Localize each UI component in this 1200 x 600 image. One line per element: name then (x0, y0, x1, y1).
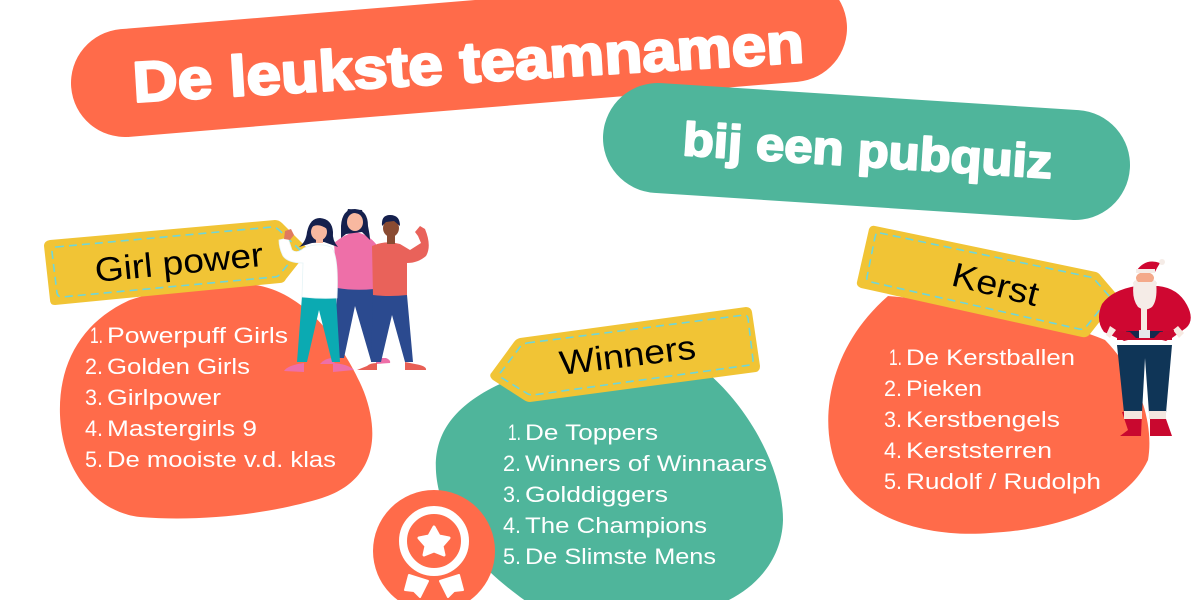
list: Girl power names: Powerpuff Girls (107, 323, 288, 348)
woman left (279, 218, 354, 372)
list: Girl power names: 3. (85, 385, 103, 410)
title banner: De leukste teamnamen: De leukste teamnamen (131, 11, 806, 115)
tag: Kerst: Kerst (948, 256, 1043, 314)
list: Kerst names: 2. (884, 376, 902, 401)
list: Winners names: Winners of Winnaars (525, 451, 767, 476)
list: Girl power names: Mastergirls 9 (107, 416, 257, 441)
list: Girl power names: De mooiste v.d. klas (107, 447, 336, 472)
list: Kerst names: 4. (884, 438, 902, 463)
blob: Winners background (436, 366, 783, 600)
list: Girl power names: 2. (85, 354, 103, 379)
list: Girl power names: 4. (85, 416, 103, 441)
panel: Kerst (828, 226, 1191, 534)
list: Kerst names: Pieken (906, 376, 982, 401)
list: Girl power names: 1. (90, 323, 103, 348)
blob: Girl power background (60, 284, 372, 518)
tag: Kerst (857, 226, 1119, 337)
list: Kerst names: 1. (889, 345, 902, 370)
icon: medal (373, 490, 495, 600)
list: Winners names: 5. (503, 544, 521, 569)
panel: Winners (373, 307, 783, 600)
list: Winners names: 3. (503, 482, 521, 507)
woman right (357, 215, 429, 370)
list: Winners names: 2. (503, 451, 521, 476)
woman centre (320, 209, 390, 364)
list: Kerst names (884, 345, 1101, 494)
list: Girl power names (85, 323, 336, 472)
blob: Kerst background (828, 296, 1149, 534)
tag: Winners (490, 307, 760, 402)
list: Kerst names: Kerststerren (906, 438, 1052, 463)
list: Kerst names: De Kerstballen (906, 345, 1075, 370)
list: Girl power names: 5. (85, 447, 103, 472)
list: Kerst names: Rudolf / Rudolph (906, 469, 1101, 494)
tag: Winners: Winners (557, 329, 698, 383)
list: Winners names: 4. (503, 513, 521, 538)
list: Winners names: Golddiggers (525, 482, 668, 507)
list: Winners names: The Champions (525, 513, 707, 538)
list: Girl power names: Girlpower (107, 385, 221, 410)
list: Winners names: De Slimste Mens (525, 544, 716, 569)
tag: Girl power: Girl power (93, 236, 265, 290)
illustration: Santa Claus (1099, 259, 1191, 436)
list: Kerst names: Kerstbengels (906, 407, 1060, 432)
list: Girl power names: Golden Girls (107, 354, 250, 379)
panel: Girl power (44, 209, 429, 518)
list: Kerst names: 5. (884, 469, 902, 494)
subtitle banner: bij een pubquiz: bij een pubquiz (681, 112, 1054, 188)
illustration: three women flexing (279, 209, 429, 372)
list: Kerst names: 3. (884, 407, 902, 432)
tag: Girl power (44, 220, 309, 305)
list: Winners names (503, 420, 767, 569)
list: Winners names: 1. (508, 420, 521, 445)
list: Winners names: De Toppers (525, 420, 658, 445)
